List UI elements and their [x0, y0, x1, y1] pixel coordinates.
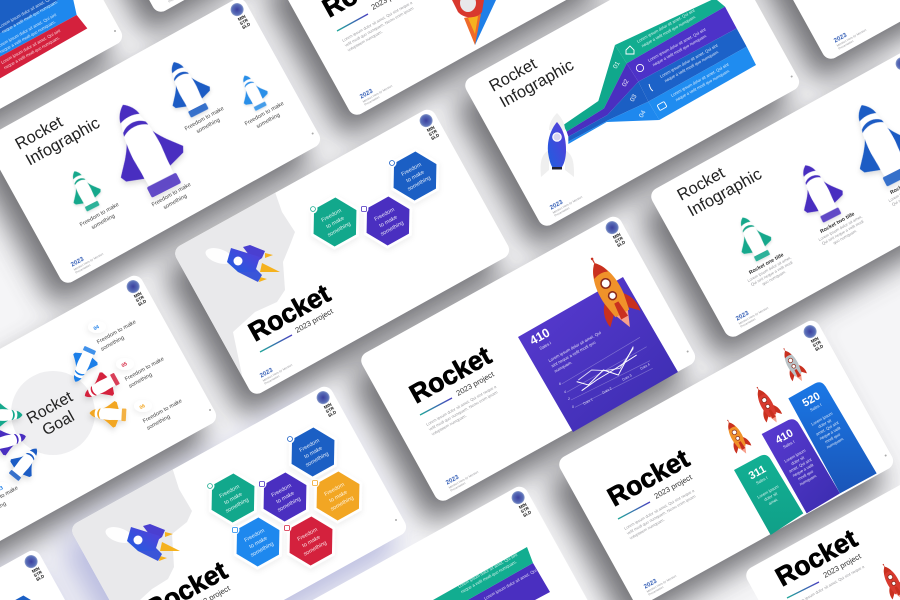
logo: STR [428, 128, 439, 137]
footer: Presentation [838, 39, 855, 51]
bar 520 [798, 388, 848, 451]
hexagon blue: something [250, 541, 275, 559]
bar 520: modi quo [824, 431, 842, 444]
bars [734, 382, 877, 535]
subtitle: 2023 project [455, 369, 496, 398]
row text: Lorem ipsum dolor sit amet. Qui sint [636, 7, 696, 44]
rocket light blue [233, 69, 273, 114]
title [486, 39, 577, 112]
footer [70, 129, 318, 275]
footer: Presentation [264, 374, 281, 386]
caption two: Rocket two title [819, 211, 856, 235]
row text: Lorem ipsum dolor sit amet. Qui sint [659, 42, 719, 79]
rocket green [61, 164, 107, 215]
caption: something [196, 117, 221, 135]
caption: Freedom to make [184, 106, 225, 132]
panel stat: numquam. [553, 360, 573, 374]
chart lines [562, 337, 653, 407]
logo [509, 489, 534, 519]
icon: red rocket [452, 0, 484, 45]
title: Rocket [486, 55, 540, 95]
footer: Presentation [554, 206, 571, 218]
bar 520: Sales I [809, 402, 822, 413]
bar 410: Lorem ipsum [783, 447, 807, 464]
title: Infographic [685, 165, 765, 220]
bar 410: Sales I [782, 439, 795, 450]
panel stat: Lorem ipsum dolor sit amet. Qui [547, 330, 602, 363]
slide: rocket goal [0, 272, 219, 563]
item text: something [146, 414, 171, 432]
title: Rocket [602, 443, 694, 512]
caption: something [163, 193, 188, 211]
footer: Mention Here by Mention [73, 252, 104, 272]
slide: rocket bottom right [743, 428, 900, 600]
stripes [0, 0, 87, 78]
hexagon dark blue: something [305, 451, 330, 469]
bar 410: dolor sit [790, 454, 806, 466]
subtitle: 2023 project [822, 551, 863, 580]
footer: Mention Here by Mention [262, 363, 293, 383]
footer: 2023 [549, 198, 565, 212]
slide: hexagons six [47, 383, 409, 600]
hexagon red: to make [301, 535, 322, 549]
hexagon red [275, 507, 347, 575]
logo [124, 278, 149, 308]
hexagon purple [249, 463, 321, 531]
slide: rocket titles right [648, 49, 900, 340]
slide: hexagons three [175, 110, 509, 394]
stripe text: Lorem ipsum dolor sit amet. Qui sint [483, 564, 545, 600]
hexagon blue: Freedom [244, 528, 266, 544]
rocket grey [776, 344, 809, 385]
hexagon purple: something [277, 496, 302, 514]
footer: Presentation [75, 263, 92, 275]
row numbers: 01 [612, 60, 622, 70]
title: Rocket [674, 164, 728, 204]
footer: Mention Here by Mention [448, 470, 479, 490]
footer [549, 72, 797, 218]
hexagon yellow: something [330, 495, 355, 513]
caption two: Lorem ipsum dolor sit amet, [817, 214, 863, 242]
logo: SLD [616, 239, 626, 248]
caption two: quo numquam. [832, 228, 858, 245]
dark blue hexagon [0, 590, 55, 600]
hexagon green: to make [223, 492, 244, 506]
footer: 2023 [445, 473, 461, 487]
hexagon purple: to make [275, 491, 296, 505]
rocket red [749, 383, 785, 427]
bar 410: 410 [774, 427, 795, 447]
footer: 2023 [735, 309, 751, 323]
item text: Freedom to make [124, 356, 165, 383]
logo: SLD [137, 298, 147, 307]
goal circle [11, 371, 95, 455]
logo: SLD [430, 132, 440, 141]
bar 410 [771, 425, 821, 488]
logo: MIN [31, 566, 40, 574]
logo: MIN [133, 291, 142, 299]
title: Infographic [497, 56, 577, 111]
axis labels: 0 [572, 405, 574, 409]
hexagon yellow: to make [328, 490, 349, 504]
item text: something [128, 372, 153, 390]
subtitle: 2023 project [294, 306, 335, 335]
hexagon icons [206, 434, 320, 534]
caption: Freedom to make [151, 182, 192, 208]
bar 520: neque a velit [819, 425, 842, 441]
logo [22, 553, 47, 583]
bar 520: amet. Qui sint [815, 420, 840, 437]
panel stat: Sales I [538, 340, 552, 351]
subtitle: 2023 project [653, 472, 694, 501]
bar 410: numquam. [799, 473, 818, 487]
title: Rocket [770, 523, 862, 592]
axis labels: 2 [568, 397, 570, 401]
paragraph: velit modi quo numquam. Nemo enim ipsam [344, 5, 415, 48]
logo: STR [33, 569, 44, 578]
logo: MIN [518, 502, 527, 510]
paragraph: Lorem ipsum dolor sit amet. Qui sint neque a [341, 0, 414, 43]
row numbers [612, 60, 648, 119]
goal title: Rocket [24, 388, 76, 428]
hexagon dark blue: to make [303, 446, 324, 460]
footer: Presentation [450, 481, 467, 493]
caption one: quo numquam. [761, 269, 787, 286]
icon: rocket [104, 524, 180, 561]
slide: rocket title top [272, 0, 612, 118]
footer: Mention Here by Mention [836, 28, 867, 48]
footer: 2023 [359, 87, 375, 101]
number pills: 04 [93, 324, 101, 332]
hexagon green: Freedom [219, 484, 241, 500]
footer [643, 451, 891, 597]
ribbons [563, 0, 756, 144]
footer: Presentation [364, 95, 381, 107]
paragraph: voluptatem numquam. [430, 413, 467, 436]
slide: rocket sales chart [358, 213, 698, 504]
panel stat [527, 304, 608, 377]
caption: something [91, 213, 116, 231]
icon: red rocket [875, 560, 900, 600]
row text: neque a velit modi quo numquam. [641, 14, 697, 48]
slide: bottom left [0, 547, 117, 600]
underline [618, 502, 650, 519]
logo: SLD [241, 21, 251, 30]
purple chart panel [518, 277, 678, 432]
rocket purple [786, 155, 852, 228]
bar 520: Lorem ipsum [810, 410, 834, 427]
rockets radial [0, 343, 127, 485]
icon: rocket [204, 245, 280, 282]
logo: SLD [814, 343, 824, 352]
axis labels: Data 2 [602, 386, 613, 395]
blue panel corner [472, 0, 496, 45]
logo: MIN [612, 232, 621, 240]
footer [359, 78, 395, 107]
footer: Presentation [740, 317, 757, 329]
bar 410: amet. Qui sint [788, 457, 813, 474]
hexagon dark blue [277, 418, 349, 486]
hexagon green: Freedom [321, 208, 343, 224]
row icons [626, 46, 667, 111]
hexagon purple: Freedom [271, 483, 293, 499]
slide: bottom stripes [264, 483, 604, 600]
logo: MIN [237, 14, 246, 22]
row text: Lorem ipsum dolor sit amet. Qui sint [670, 61, 730, 98]
hexagon green: something [225, 497, 250, 515]
hexagon blue: Freedom [401, 162, 423, 178]
slide: rocket sales bars [556, 317, 896, 600]
footer: Mention Here by Mention [552, 195, 583, 215]
rocket purple [92, 89, 198, 206]
footer [166, 0, 199, 4]
slide: ribbon infographic [462, 0, 802, 229]
hexagon green: something [327, 221, 352, 239]
stripe text: Lorem ipsum dolor sit amet. Qui sint [0, 28, 62, 65]
axis labels: Data 3 [622, 373, 633, 382]
bar 311 [744, 462, 785, 509]
paragraph: voluptatem numquam. [346, 29, 383, 52]
footer [445, 347, 693, 493]
underline [787, 582, 819, 598]
logo [417, 112, 442, 142]
stripe text: Lorem ipsum dolor sit amet. Qui sint [457, 552, 519, 589]
item text [0, 485, 23, 519]
logo [893, 55, 900, 85]
caption three [884, 170, 900, 207]
bar 520: 520 [801, 390, 822, 410]
panel stat: 410 [527, 325, 552, 348]
caption one: Lorem ipsum dolor sit amet, [746, 255, 792, 283]
footer: 2023 [643, 577, 659, 591]
bar 311: dolor sit [763, 490, 779, 502]
grey cloud area [176, 193, 295, 377]
row text: neque a velit modi quo numquam. [664, 49, 720, 83]
underline [337, 14, 368, 31]
row numbers: 03 [629, 93, 639, 103]
hexagon yellow [302, 462, 374, 530]
caption one [743, 250, 797, 292]
bar 520: dolor sit [817, 417, 833, 429]
title [674, 148, 765, 221]
number pills: 05 [121, 361, 129, 369]
footer [833, 22, 869, 51]
title: Infographic [23, 114, 103, 169]
number pills: 06 [139, 403, 147, 411]
paragraph: velit modi quo numquam. Nemo enim ipsam [428, 389, 499, 432]
axis labels: 6 [559, 382, 561, 386]
item text: something [100, 335, 125, 353]
stripe text: neque a velit modi quo numquam. [3, 35, 61, 70]
row text: neque a velit modi quo numquam. [652, 33, 708, 67]
logo: MIN [323, 402, 332, 410]
logo: SLD [327, 409, 337, 418]
caption two [814, 209, 868, 251]
number pills [0, 321, 152, 494]
logo: MIN [810, 336, 819, 344]
logo: STR [239, 17, 250, 26]
hexagon red: Freedom [297, 527, 319, 543]
hexagon purple: Freedom [374, 207, 396, 223]
logo: SLD [522, 509, 532, 518]
footer: Mention Here by Mention [738, 306, 769, 326]
panel stat: sint neque a velit modi quo [550, 339, 597, 368]
title: Rocket [243, 278, 335, 347]
paragraph: Lorem ipsum dolor sit amet. Qui sint neque a [623, 488, 696, 531]
rocket [541, 113, 574, 177]
axis labels [559, 362, 651, 409]
icon: orange rocket [576, 249, 645, 336]
axis labels: Data 4 [640, 362, 651, 371]
grey cloud area [72, 470, 192, 600]
row text: neque a velit modi quo numquam. [675, 68, 731, 102]
slide: top right corner card [746, 0, 900, 62]
goal title: Goal [40, 408, 77, 439]
row numbers: 02 [621, 78, 631, 88]
caption one: Qui sint neque a velit modi [750, 260, 794, 287]
hexagon blue: to make [248, 536, 269, 550]
caption one: Rocket one title [748, 252, 785, 276]
paragraph: Lorem ipsum dolor sit amet. Qui sint neque a [425, 384, 498, 427]
hexagon green [197, 464, 269, 532]
logo: STR [520, 505, 531, 514]
row text: Lorem ipsum dolor sit amet. Qui sint [647, 26, 707, 63]
paragraph: voluptatem numquam. [628, 517, 665, 540]
hexagon yellow: Freedom [324, 482, 346, 498]
paragraph: velit modi quo numquam. Nemo enim ipsam [626, 493, 697, 536]
row numbers: 04 [638, 109, 648, 119]
item text: Freedom to make [142, 398, 183, 425]
caption: Freedom to make [244, 101, 285, 127]
logo: MIN [426, 125, 435, 133]
stripes [433, 547, 550, 600]
bar 311: 311 [747, 463, 768, 482]
axis labels: 4 [564, 390, 566, 394]
stripe text: neque a velit modi quo numquam. [0, 19, 57, 54]
caption: Freedom to make [79, 202, 120, 228]
footer: 2023 [70, 255, 86, 269]
title: Rocket [12, 113, 66, 153]
stripe text: neque a velit modi quo numquam. [460, 559, 518, 594]
rocket green [728, 210, 778, 266]
title: Rocket [404, 340, 496, 409]
hexagon dark blue: Freedom [299, 438, 321, 454]
hexagon red: something [303, 540, 328, 558]
bar 311: amet. [768, 497, 779, 506]
logo [228, 1, 253, 31]
footer [259, 357, 295, 386]
bar 410: neque a velit [792, 462, 815, 478]
hexagon icons [308, 158, 396, 214]
hexagon blue: to make [405, 170, 426, 184]
logo: STR [325, 405, 336, 414]
logo [801, 323, 826, 353]
logo [603, 219, 628, 249]
bar 410: modi quo [797, 468, 815, 481]
axis labels: Data 1 [583, 397, 594, 406]
bar 311: Sales I [755, 475, 768, 486]
slide: rocket infographic left [0, 0, 323, 286]
goal title [24, 388, 85, 443]
slide: stripes top left [0, 0, 125, 183]
hexagon blue: something [407, 175, 432, 193]
caption two: Qui sint neque a velit modi [821, 219, 865, 246]
stripe text: neque a velit modi quo numquam. [1, 0, 59, 34]
rocket blue [155, 53, 219, 123]
logo: STR [135, 294, 146, 303]
hexagon blue [379, 142, 451, 210]
hexagon purple: to make [378, 215, 399, 229]
underline [420, 398, 452, 415]
logo: SLD [35, 573, 45, 582]
logo: STR [812, 339, 823, 348]
bar 520: numquam. [826, 436, 845, 450]
hexagon green [299, 188, 371, 256]
hexagon purple: something [380, 220, 405, 238]
logo [314, 389, 339, 419]
logo: STR [614, 235, 625, 244]
hexagon purple [352, 187, 424, 255]
rocket orange [720, 416, 754, 458]
footer: 2023 [833, 31, 849, 45]
footer: Presentation [648, 585, 665, 597]
item text: Freedom to make [96, 319, 137, 346]
title [12, 97, 103, 170]
footer: Mention Here by Mention [362, 84, 393, 104]
footer: Mention Here by Mention [646, 574, 677, 594]
hexagon blue [222, 508, 294, 576]
footer: 2023 [259, 366, 275, 380]
underline [260, 335, 292, 352]
hexagon green: to make [325, 216, 346, 230]
slide: small top card [76, 0, 416, 15]
footer [735, 300, 771, 329]
rocket blue [834, 91, 900, 194]
bar 311: Lorem ipsum [756, 483, 780, 500]
caption: something [256, 112, 281, 130]
